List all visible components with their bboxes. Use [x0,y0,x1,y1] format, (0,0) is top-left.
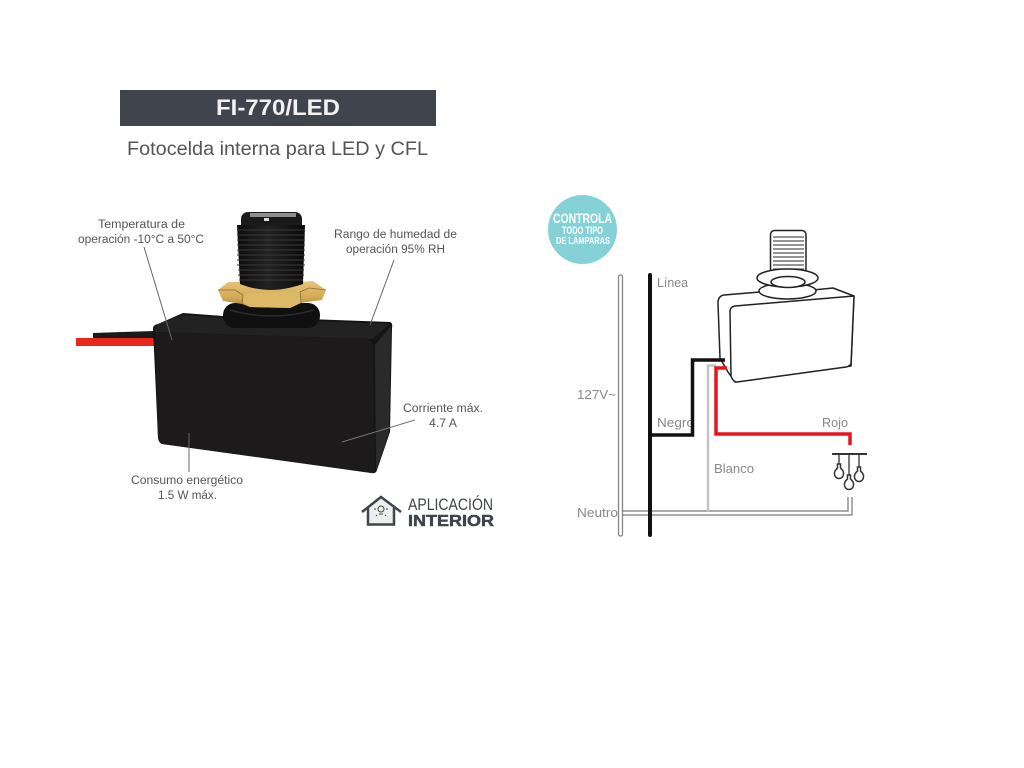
labels: Línea [657,276,688,290]
threaded barrel [237,212,305,290]
label: aplicación interior: APLICACIÓN [408,495,493,514]
badge: controla todo tipo de lámparas: TODO TIPO [562,225,603,237]
callout: humidity [334,229,457,325]
callout: humidity: Rango de humedad de [334,229,457,241]
housing [153,313,392,473]
callout: humidity: operación 95% RH [346,244,445,256]
wiring diagram [577,230,867,536]
callout: temperature [78,219,204,340]
rubber o-ring [223,303,320,328]
callout: current: Corriente máx. [403,403,483,415]
labels: 127V~ [577,388,616,402]
label: aplicación interior: INTERIOR [408,513,494,530]
badge: controla todo tipo de lámparas: CONTROLA [553,210,612,226]
callout: energy consumption: 1.5 W máx. [158,490,217,502]
white wire [708,366,716,512]
title bar: FI-770/LED [216,95,340,120]
labels [577,276,848,520]
line wire [648,275,652,535]
subtitle: Fotocelda interna para LED y CFL [127,138,428,160]
callout: temperature: Temperatura de [98,219,185,231]
icon: house with light bulb [362,497,401,524]
badge: controla todo tipo de lámparas [548,195,617,264]
callout: temperature: operación -10°C a 50°C [78,234,204,246]
callout: energy consumption [131,433,243,502]
labels: Rojo [822,416,848,430]
product photo: photocell [76,212,392,473]
title bar [120,90,436,126]
callout: current [342,403,483,442]
wire: red and black leads [76,331,154,346]
black wire [650,360,725,435]
labels: Blanco [714,462,754,476]
callout: energy consumption: Consumo energético [131,475,243,487]
label: aplicación interior [408,495,494,530]
labels: Neutro [577,506,618,520]
device outline [718,230,854,382]
badge: controla todo tipo de lámparas: DE LÁMPARAS [556,234,610,247]
neutral rail [618,275,622,536]
callout: current: 4.7 A [429,418,457,430]
labels: Negro [657,416,694,430]
icon: ceiling lamp [832,454,867,490]
brass nut [218,281,326,308]
neutral bus to lamp [622,497,852,515]
red wire [716,368,850,445]
